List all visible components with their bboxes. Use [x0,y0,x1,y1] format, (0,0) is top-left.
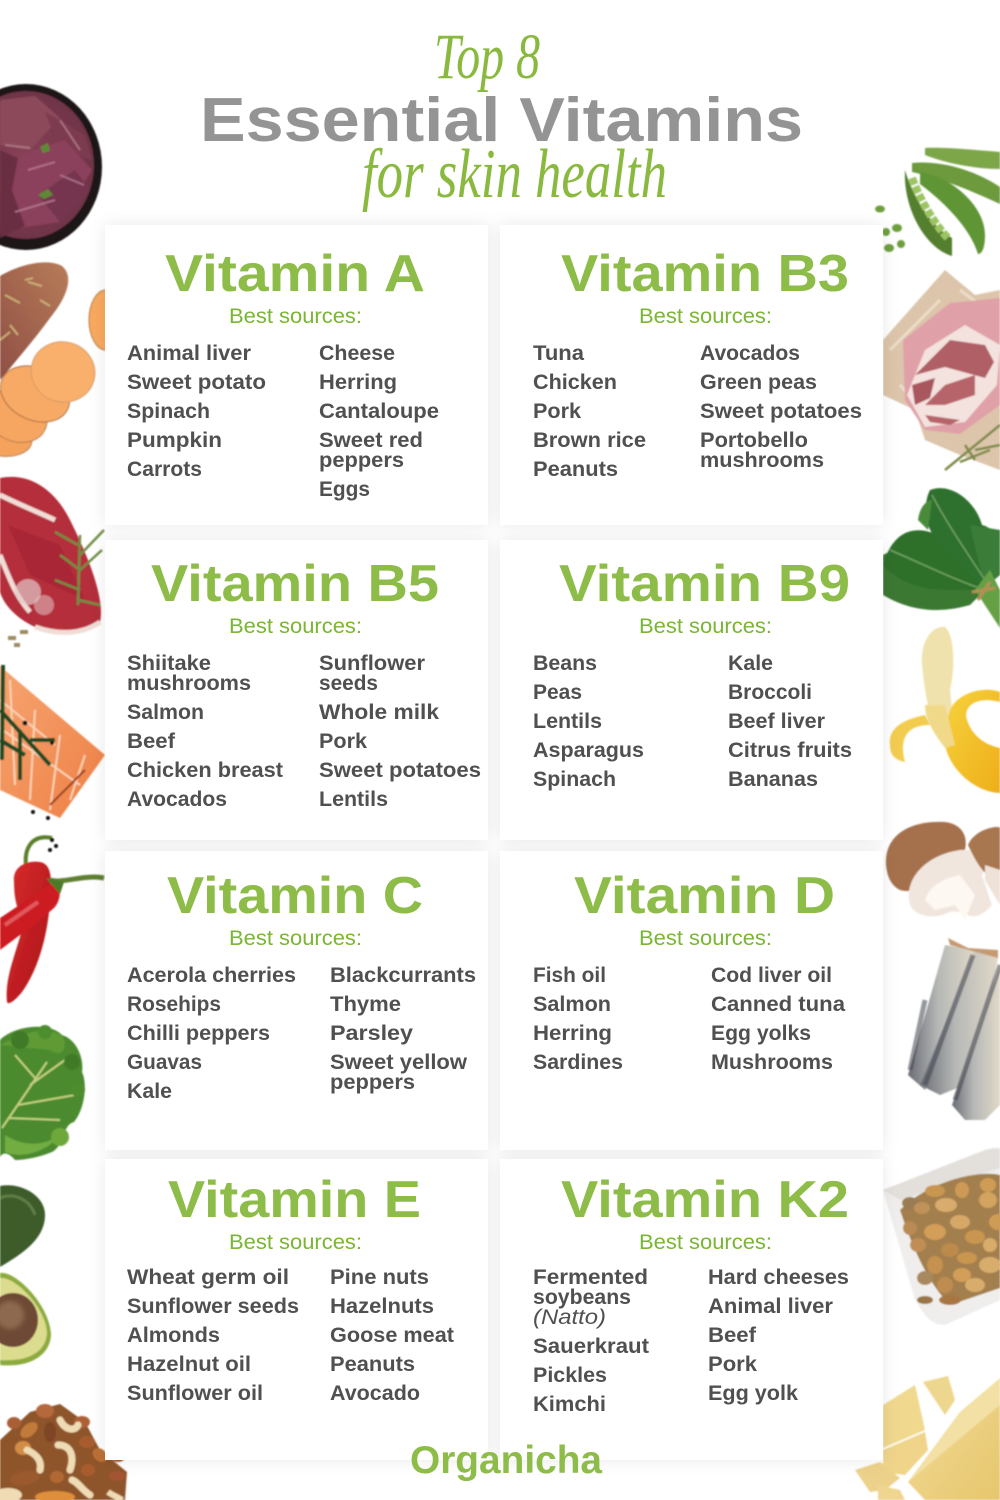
icon: salmon fillet [0,665,105,820]
list: sources column 2: Citrus fruits [728,739,852,762]
list: sources column 2: Canned tuna [711,993,845,1016]
list: sources column 2: Broccoli [728,681,812,704]
list: sources column 1: Pickles [533,1364,607,1387]
subheading: best sources: Best sources: [639,615,772,638]
list: sources column 2: Goose meat [330,1324,454,1347]
list: sources column 1: mushrooms [127,672,251,695]
list: sources column 2: mushrooms [700,449,824,472]
list: sources column 2: Pork [708,1353,757,1376]
list: sources column 1: Acerola cherries [127,964,296,987]
list: sources column 2: Beef [708,1324,757,1347]
list: sources column 2: Pine nuts [330,1266,429,1289]
icon: avocado whole and half [0,1185,51,1365]
list: sources column 1: Pork [533,400,581,423]
list: sources column 1: Wheat germ oil [127,1266,289,1289]
list: sources column 2 [700,342,862,472]
icon: spinach bunch [883,488,1000,628]
subheading: best sources: Best sources: [639,927,772,950]
icon: cheese [855,1376,1000,1500]
list: sources column 2: Sweet potatoes [700,400,862,423]
panel: Vitamin K2 [500,1159,883,1460]
list: sources column 1: Sunflower seeds [127,1295,299,1318]
list: sources column 2 [330,964,476,1094]
list: sources column 1: Beans [533,652,597,675]
subheading: best sources: Best sources: [229,927,362,950]
list: sources column 2: peppers [319,449,404,472]
list: sources column 1: Sunflower oil [127,1382,263,1405]
list: sources column 2: Herring [319,371,397,394]
list: sources column 1: Asparagus [533,739,644,762]
list: sources column 2: Avocados [700,342,800,365]
list: sources column 2 [711,964,845,1074]
list: sources column 2: seeds [319,672,378,695]
panel: Vitamin B5 [105,540,488,840]
list: sources column 2: Blackcurrants [330,964,476,987]
title line: for skin health: for skin health [362,136,667,213]
list: sources column 2: Animal liver [708,1295,833,1318]
list: sources column 2: Hazelnuts [330,1295,434,1318]
list: sources column 1: Chilli peppers [127,1022,270,1045]
list: sources column 2 [319,342,439,501]
list: sources column 1: (Natto) [533,1306,606,1329]
list: sources column 1: Peanuts [533,458,618,481]
list: sources column 1: Chicken breast [127,759,283,782]
list: sources column 2 [319,652,481,811]
title block [200,21,803,213]
heading: Vitamin E: Vitamin E [168,1171,421,1229]
list: sources column 1: Animal liver [127,342,251,365]
list: sources column 2: Eggs [319,478,370,501]
list: sources column 1: Spinach [127,400,210,423]
title line: Essential Vitamins: Essential Vitamins [200,86,803,155]
list: sources column 1: Lentils [533,710,602,733]
list: sources column 1: Fish oil [533,964,606,987]
list: sources column 1: Pumpkin [127,429,222,452]
list: sources column 1: Carrots [127,458,202,481]
list: sources column 1 [533,1266,649,1416]
icon: chili peppers [0,837,104,1003]
list: sources column 2: Avocado [330,1382,420,1405]
list: sources column 2: Bananas [728,768,818,791]
food images: left column [0,84,127,1500]
list: sources column 2 [728,652,852,791]
panel: Vitamin B9 [500,540,883,840]
list: sources column 2: Green peas [700,371,817,394]
icon: green peas [875,148,1000,256]
list: sources column 1: Hazelnut oil [127,1353,251,1376]
list: sources column 1: Sardines [533,1051,623,1074]
list: sources column 2: Peanuts [330,1353,415,1376]
panel: Vitamin C [105,851,488,1150]
list: sources column 2: Portobello [700,429,808,452]
heading: Vitamin B3: Vitamin B3 [561,245,849,303]
list: sources column 1: Salmon [127,701,204,724]
list: sources column 2: Egg yolks [711,1022,811,1045]
list: sources column 1: Sweet potato [127,371,266,394]
list: sources column 1: Salmon [533,993,611,1016]
icon: banana [890,627,1000,793]
list: sources column 1: Almonds [127,1324,220,1347]
list: sources column 2: peppers [330,1071,415,1094]
heading: Vitamin C: Vitamin C [167,867,423,925]
list: sources column 2: Sweet yellow [330,1051,468,1074]
list: sources column 2: Cod liver oil [711,964,832,987]
subheading: best sources: Best sources: [229,615,362,638]
list: sources column 2: Beef liver [728,710,825,733]
list: sources column 2: Kale [728,652,773,675]
heading: Vitamin B9: Vitamin B9 [559,555,850,613]
list: sources column 1: Sauerkraut [533,1335,649,1358]
list: sources column 2: Sweet red [319,429,423,452]
list: sources column 1: Tuna [533,342,584,365]
list: sources column 1: soybeans [533,1286,631,1309]
list: sources column 2 [330,1266,454,1405]
list: sources column 2: Hard cheeses [708,1266,849,1289]
panel: Vitamin B3 [500,225,883,525]
list: sources column 2: Lentils [319,788,388,811]
heading: Vitamin B5: Vitamin B5 [151,555,439,613]
list: sources column 2: Sweet potatoes [319,759,481,782]
list: sources column 1 [127,1266,299,1405]
subheading: best sources: Best sources: [639,305,772,328]
icon: pork on paper [883,270,1000,470]
list: sources column 1: Kimchi [533,1393,606,1416]
list: sources column 1: Peas [533,681,582,704]
list: sources column 1: Rosehips [127,993,221,1016]
list: sources column 1: Shiitake [127,652,211,675]
list: sources column 2: Egg yolk [708,1382,798,1405]
list: sources column 1: Brown rice [533,429,646,452]
list: sources column 1: Spinach [533,768,616,791]
list: sources column 1 [127,964,296,1103]
heading: Vitamin K2: Vitamin K2 [561,1171,849,1229]
icon: pile of nuts [0,1404,127,1500]
logo: Organicha: Organicha [410,1439,602,1482]
icon: natto tray [883,1148,1000,1325]
list: sources column 1: Kale [127,1080,172,1103]
list: sources column 1 [127,652,283,811]
subheading: best sources: Best sources: [229,1231,362,1254]
title line: Top 8: Top 8 [434,21,540,93]
panel shadows [105,225,883,1460]
list: sources column 1 [127,342,266,481]
list: sources column 2: Pork [319,730,367,753]
list: sources column 2: Cantaloupe [319,400,439,423]
list: sources column 2: Cheese [319,342,395,365]
list: sources column 2: Whole milk [319,701,439,724]
list: sources column 1: Beef [127,730,176,753]
panel: Vitamin A [105,225,488,525]
icon: kale leaf [0,1025,85,1160]
icon: sweet potato [0,262,123,460]
list: sources column 1: Guavas [127,1051,202,1074]
list: sources column 1 [533,964,623,1074]
food images: right column [855,148,1000,1500]
list: sources column 1: Fermented [533,1266,648,1289]
list: sources column 1: Chicken [533,371,617,394]
list: sources column 2 [708,1266,849,1405]
icon: sardines [908,938,1000,1120]
list: sources column 1: Herring [533,1022,612,1045]
list: sources column 1 [533,652,644,791]
list: sources column 2: Mushrooms [711,1051,833,1074]
icon: bowl of liver [0,84,102,250]
icon: beef steak [0,477,104,645]
subheading: best sources: Best sources: [229,305,362,328]
subheading: best sources: Best sources: [639,1231,772,1254]
list: sources column 2: Parsley [330,1022,413,1045]
panel: Vitamin D [500,851,883,1150]
heading: Vitamin A: Vitamin A [165,245,425,303]
list: sources column 2: Thyme [330,993,401,1016]
icon: mushrooms [886,822,1000,920]
panel: Vitamin E [105,1159,488,1460]
list: sources column 1 [533,342,646,481]
heading: Vitamin D: Vitamin D [574,867,835,925]
list: sources column 1: Avocados [127,788,227,811]
list: sources column 2: Sunflower [319,652,425,675]
